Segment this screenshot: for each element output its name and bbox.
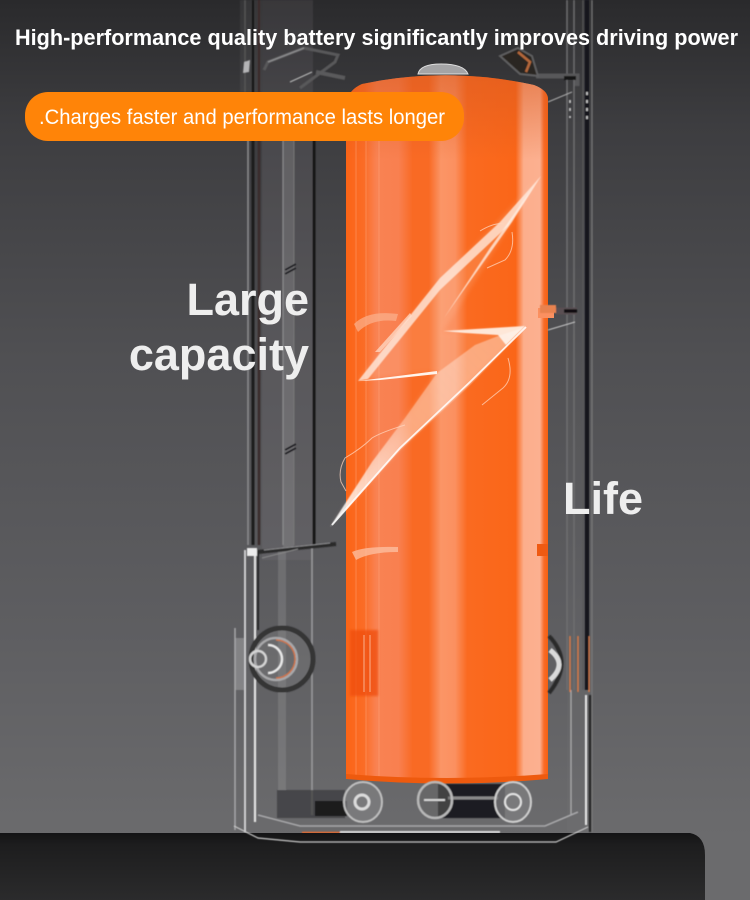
left verticals — [252, 0, 254, 545]
bolt body glow — [330, 177, 540, 527]
icon: lightning bolt — [330, 176, 541, 527]
battery body — [346, 75, 548, 780]
battery reflections — [354, 313, 398, 332]
mid clips — [285, 264, 296, 274]
right verticals — [567, 0, 574, 690]
bottom coil 1 — [277, 782, 382, 822]
base of upper bolt — [358, 371, 437, 381]
bottom coil 2 — [418, 782, 531, 822]
translucent bands — [262, 0, 313, 560]
spring contact right — [549, 636, 589, 693]
label: life: Life — [563, 473, 643, 524]
title: High-performance quality battery significantly improves driving power — [15, 25, 738, 50]
pill text: .Charges faster and performance lasts longer — [39, 106, 445, 129]
lower edge — [330, 327, 526, 527]
base tray — [258, 812, 578, 826]
icon: transparent battery holder front base — [235, 309, 590, 833]
top clips — [264, 48, 338, 88]
battery top contact — [418, 64, 468, 74]
bolt filaments — [340, 224, 513, 491]
spring contact left — [240, 628, 313, 690]
base platform — [0, 833, 705, 900]
shelf clips — [258, 544, 336, 552]
orange pill — [25, 92, 464, 141]
label: large capacity: Large — [186, 274, 309, 325]
upper left edge — [358, 176, 541, 381]
icon: transparent battery holder back frame — [240, 0, 592, 832]
transparent tray foreground — [234, 826, 588, 842]
middle edge — [443, 326, 525, 345]
icon: orange battery — [346, 64, 554, 784]
label: large capacity: capacity — [129, 329, 309, 380]
lower frame verticals — [244, 550, 246, 832]
label: large capacity — [129, 274, 309, 380]
